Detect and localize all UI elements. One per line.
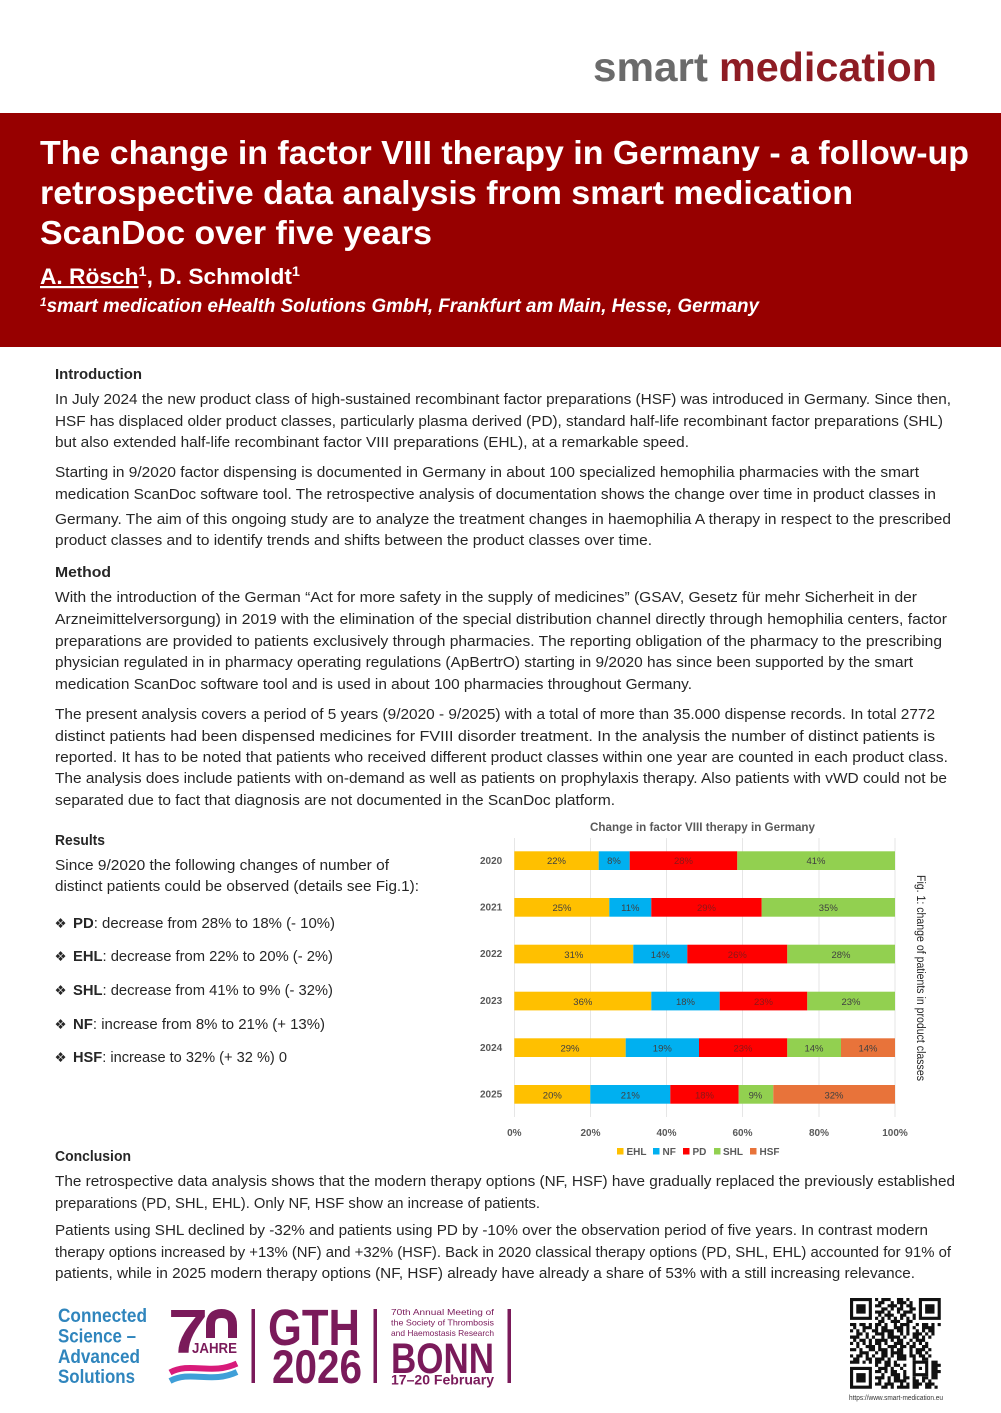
text: results intro bbox=[55, 858, 419, 895]
x axis labels: 80% bbox=[809, 1128, 829, 1139]
bar 2025: 2025 bbox=[480, 1090, 503, 1100]
slogan: connected science: Advanced bbox=[58, 1347, 140, 1368]
text: method paragraph 1 bbox=[55, 590, 947, 693]
bar 2022: 31% bbox=[564, 950, 584, 961]
text: conclusion paragraph 2: Patients using SHL declined by -32% and patients using PD by -10% over the observation period of five years. In contrast modern bbox=[55, 1223, 928, 1239]
heading: method: Method bbox=[55, 565, 111, 581]
x axis labels: 100% bbox=[882, 1128, 908, 1139]
authors: 1 bbox=[139, 263, 147, 279]
logo: 70 Jahre: JAHRE bbox=[192, 1341, 237, 1357]
title: The change in factor VIII therapy in Germany - a follow-up bbox=[40, 134, 969, 171]
bar 2025: 20% bbox=[543, 1090, 562, 1102]
text: introduction paragraph 2 bbox=[55, 465, 951, 549]
bar 2025: 32% bbox=[824, 1090, 844, 1102]
title: ScanDoc over five years bbox=[40, 214, 432, 251]
QR caption: https://www.smart-medication.eu bbox=[849, 1395, 943, 1402]
affiliation: smart medication eHealth Solutions GmbH, Frankfurt am Main, Hesse, Germany bbox=[47, 296, 760, 317]
section: results bbox=[54, 833, 419, 1066]
bar 2024: 2024 bbox=[480, 1043, 503, 1054]
text: conclusion paragraph 2: patients, while in 2025 modern therapy options (NF, HSF) already have already a share of 53% with a still increasing relevance. bbox=[55, 1266, 915, 1282]
logo: smart medication bbox=[593, 44, 937, 90]
list: product class changes: SHL: decrease from 41% to 9% (- 32%) bbox=[73, 983, 333, 999]
bar 2023: 2023 bbox=[480, 996, 503, 1007]
bar 2022 bbox=[480, 945, 895, 963]
text: conclusion paragraph 1: The retrospective data analysis shows that the modern therapy options (NF, HSF) have gradually replaced the previously established bbox=[55, 1174, 955, 1190]
logo: GTH 2026 Bonn: 70th Annual Meeting of bbox=[391, 1307, 495, 1317]
bar 2025: 18% bbox=[695, 1090, 715, 1102]
text: method paragraph 1: Arzneimittelversorgung) in 2019 with the elimination of the special distribution channel directly through hemophilia centers, factor bbox=[55, 612, 947, 628]
bar 2020: 22% bbox=[547, 856, 567, 867]
text: method paragraph 2: The analysis does include patients with on-demand as well as patients on prophylaxis therapy. Also patients with vWD could not be bbox=[55, 771, 947, 787]
text: results intro: Since 9/2020 the following changes of number of bbox=[55, 858, 390, 874]
list: product class changes: ❖ bbox=[54, 916, 67, 932]
bar 2024 bbox=[480, 1038, 895, 1057]
list: product class changes: ❖ bbox=[54, 1017, 67, 1033]
bar 2020: 41% bbox=[806, 856, 826, 867]
slogan: connected science: Science – bbox=[58, 1326, 136, 1348]
title bbox=[40, 134, 969, 251]
list: product class changes: ❖ bbox=[54, 949, 67, 965]
bar 2023: 18% bbox=[676, 997, 696, 1008]
slogan: connected science: Solutions bbox=[58, 1367, 135, 1388]
text: introduction paragraph 1: In July 2024 the new product class of high-sustained recombinant factor preparations (HSF) was introduced in Germany. Since then, bbox=[55, 392, 951, 408]
bar 2023 bbox=[480, 992, 895, 1010]
text: method paragraph 1: physician regulated in in pharmacy operating regulations (ApBertrO) starting in 9/2020 has since been supported by the smart bbox=[55, 655, 913, 671]
list: product class changes: PD: decrease from 28% to 18% (- 10%) bbox=[73, 916, 335, 932]
bar 2024: 14% bbox=[858, 1044, 878, 1054]
slogan: connected science: Connected bbox=[58, 1306, 147, 1327]
x axis labels bbox=[507, 1128, 908, 1139]
authors: 1 bbox=[292, 263, 300, 279]
bar 2025: 21% bbox=[621, 1090, 640, 1102]
title: retrospective data analysis from smart medication bbox=[40, 174, 853, 211]
text: introduction paragraph 1 bbox=[55, 392, 951, 451]
x axis labels: 60% bbox=[732, 1128, 753, 1139]
logo: 70 Jahre bbox=[168, 1298, 237, 1381]
legend: PD bbox=[692, 1147, 706, 1158]
bar 2021 bbox=[480, 898, 895, 917]
list: product class changes: EHL: decrease from 22% to 20% (- 2%) bbox=[73, 949, 333, 965]
authors: A. Rösch bbox=[40, 264, 139, 289]
logo: GTH 2026 Bonn: the Society of Thrombosis bbox=[391, 1318, 494, 1328]
text: introduction paragraph 1: but also extended half-life recombinant factor VIII preparations (EHL), at a remarkable speed. bbox=[55, 435, 689, 451]
text: introduction paragraph 1: HSF has displaced older product classes, particularly plasma derived (PD), standard half-life recombinant factor preparations (SHL) bbox=[55, 414, 943, 430]
bar 2021: 29% bbox=[697, 903, 717, 914]
legend: NF bbox=[662, 1147, 676, 1158]
header banner bbox=[0, 113, 1001, 347]
bar 2020: 28% bbox=[674, 856, 694, 867]
text: conclusion paragraph 2: therapy options increased by +13% (NF) and +32% (HSF). Back in 2020 classical therapy options (PD, SHL, EHL) accounted for 91% of bbox=[55, 1245, 952, 1261]
bar 2024: 23% bbox=[733, 1044, 753, 1054]
bar 2021: 25% bbox=[552, 903, 572, 914]
bar 2021: 35% bbox=[819, 903, 838, 914]
logo: smart medication: smart bbox=[593, 44, 708, 90]
text: introduction paragraph 2: Germany. The aim of this ongoing study are to analyze the treatment changes in haemophilia A therapy in respect to the prescribed bbox=[55, 512, 951, 528]
bar 2020: 2020 bbox=[480, 856, 503, 867]
text: method paragraph 1: preparations are provided to patients exclusively through pharmacies. The reporting obligation of the pharmacy to the prescribing bbox=[55, 634, 942, 650]
text: method paragraph 1: With the introduction of the German “Act for more safety in the supply of medicines” (GSAV, Gesetz für mehr Sicherheit in der bbox=[55, 590, 917, 606]
logo: GTH 2026 Bonn: GTH bbox=[268, 1299, 360, 1356]
logo: GTH 2026 Bonn bbox=[168, 1298, 511, 1393]
list: product class changes bbox=[54, 916, 335, 1066]
x axis labels: 40% bbox=[656, 1128, 677, 1139]
bar 2024: 14% bbox=[804, 1044, 824, 1054]
heading: results: Results bbox=[55, 833, 105, 849]
bar 2025 bbox=[480, 1085, 895, 1104]
logo: GTH 2026 Bonn: and Haemostasis Research bbox=[391, 1328, 494, 1338]
legend: EHL bbox=[626, 1147, 646, 1158]
bar 2022: 14% bbox=[651, 950, 670, 961]
legend: SHL bbox=[723, 1147, 743, 1158]
text: method paragraph 2: The present analysis covers a period of 5 years (9/2020 - 9/2025) with a total of more than 35.000 dispense records. In total 2772 bbox=[55, 707, 935, 723]
bar 2022: 28% bbox=[831, 950, 851, 961]
authors: , D. Schmoldt bbox=[147, 264, 293, 289]
text: conclusion paragraph 2 bbox=[55, 1223, 952, 1282]
bar 2022: 26% bbox=[728, 950, 747, 961]
heading: conclusion: Conclusion bbox=[55, 1149, 131, 1165]
bar 2022: 2022 bbox=[480, 949, 503, 960]
section: method bbox=[55, 565, 948, 809]
bar 2023: 23% bbox=[754, 997, 774, 1008]
text: method paragraph 2: distinct patients had been dispensed medicines for FVIII disorder treatment. In the analysis the number of distinct patients is bbox=[55, 729, 935, 745]
bar 2025: 9% bbox=[749, 1090, 763, 1102]
x axis labels: 0% bbox=[507, 1128, 522, 1139]
slogan: connected science bbox=[58, 1306, 147, 1388]
text: conclusion paragraph 1 bbox=[55, 1174, 955, 1212]
x axis labels: 20% bbox=[580, 1128, 601, 1139]
bar 2024: 29% bbox=[560, 1044, 580, 1054]
text: introduction paragraph 2: medication ScanDoc software tool. The retrospective analysis of documentation shows the change over time in product classes in bbox=[55, 487, 936, 503]
legend: HSF bbox=[760, 1147, 780, 1158]
bar 2020: 8% bbox=[607, 856, 621, 867]
text: method paragraph 2: separated due to fact that diagnosis are not documented in the ScanDoc platform. bbox=[55, 793, 615, 809]
heading: introduction: Introduction bbox=[55, 367, 142, 383]
list: product class changes: ❖ bbox=[54, 983, 67, 999]
logo: smart medication: medication bbox=[719, 44, 937, 90]
bar 2021: 2021 bbox=[480, 902, 503, 914]
text: introduction paragraph 2: Starting in 9/2020 factor dispensing is documented in Germany in about 100 specialized hemophilia pharmacies with the smart bbox=[55, 465, 919, 481]
bar 2024: 19% bbox=[653, 1044, 672, 1054]
text: method paragraph 1: medication ScanDoc software tool and is used in about 100 pharmacies throughout Germany. bbox=[55, 677, 692, 693]
logo: GTH 2026 Bonn: BONN bbox=[391, 1335, 494, 1383]
legend bbox=[617, 1147, 780, 1158]
list: product class changes: NF: increase from 8% to 21% (+ 13%) bbox=[73, 1017, 325, 1033]
text: introduction paragraph 2: product classes and to identify trends and shifts between the product classes over time. bbox=[55, 533, 652, 549]
text: method paragraph 2 bbox=[55, 707, 948, 809]
figure caption: Fig. 1: change of patients in product classes bbox=[914, 875, 926, 1081]
bar 2023: 36% bbox=[573, 997, 593, 1008]
text: conclusion paragraph 1: preparations (PD, SHL, EHL). Only NF, HSF show an increase of patients. bbox=[55, 1196, 540, 1212]
bar 2021: 11% bbox=[621, 903, 640, 914]
section: conclusion bbox=[55, 1149, 955, 1282]
text: method paragraph 2: reported. It has to be noted that patients who received different product classes within one year are counted in each product class. bbox=[55, 750, 948, 766]
logo: 70 Jahre: 7 bbox=[168, 1298, 208, 1367]
chart title: Change in factor VIII therapy in Germany bbox=[590, 820, 815, 834]
text: results intro: distinct patients could be observed (details see Fig.1): bbox=[55, 879, 419, 895]
list: product class changes: HSF: increase to 32% (+ 32 %) 0 bbox=[73, 1050, 287, 1066]
section: introduction bbox=[55, 367, 951, 549]
logo: GTH 2026 Bonn: 2026 bbox=[272, 1340, 362, 1393]
QR code bbox=[850, 1298, 941, 1389]
logo: GTH 2026 Bonn: 17–20 February bbox=[391, 1372, 494, 1388]
list: product class changes: ❖ bbox=[54, 1050, 67, 1066]
bar chart: change in factor VIII therapy bbox=[480, 820, 908, 1158]
bar 2023: 23% bbox=[841, 997, 861, 1008]
affiliation: 1 bbox=[40, 295, 47, 309]
bar 2020 bbox=[480, 851, 895, 870]
